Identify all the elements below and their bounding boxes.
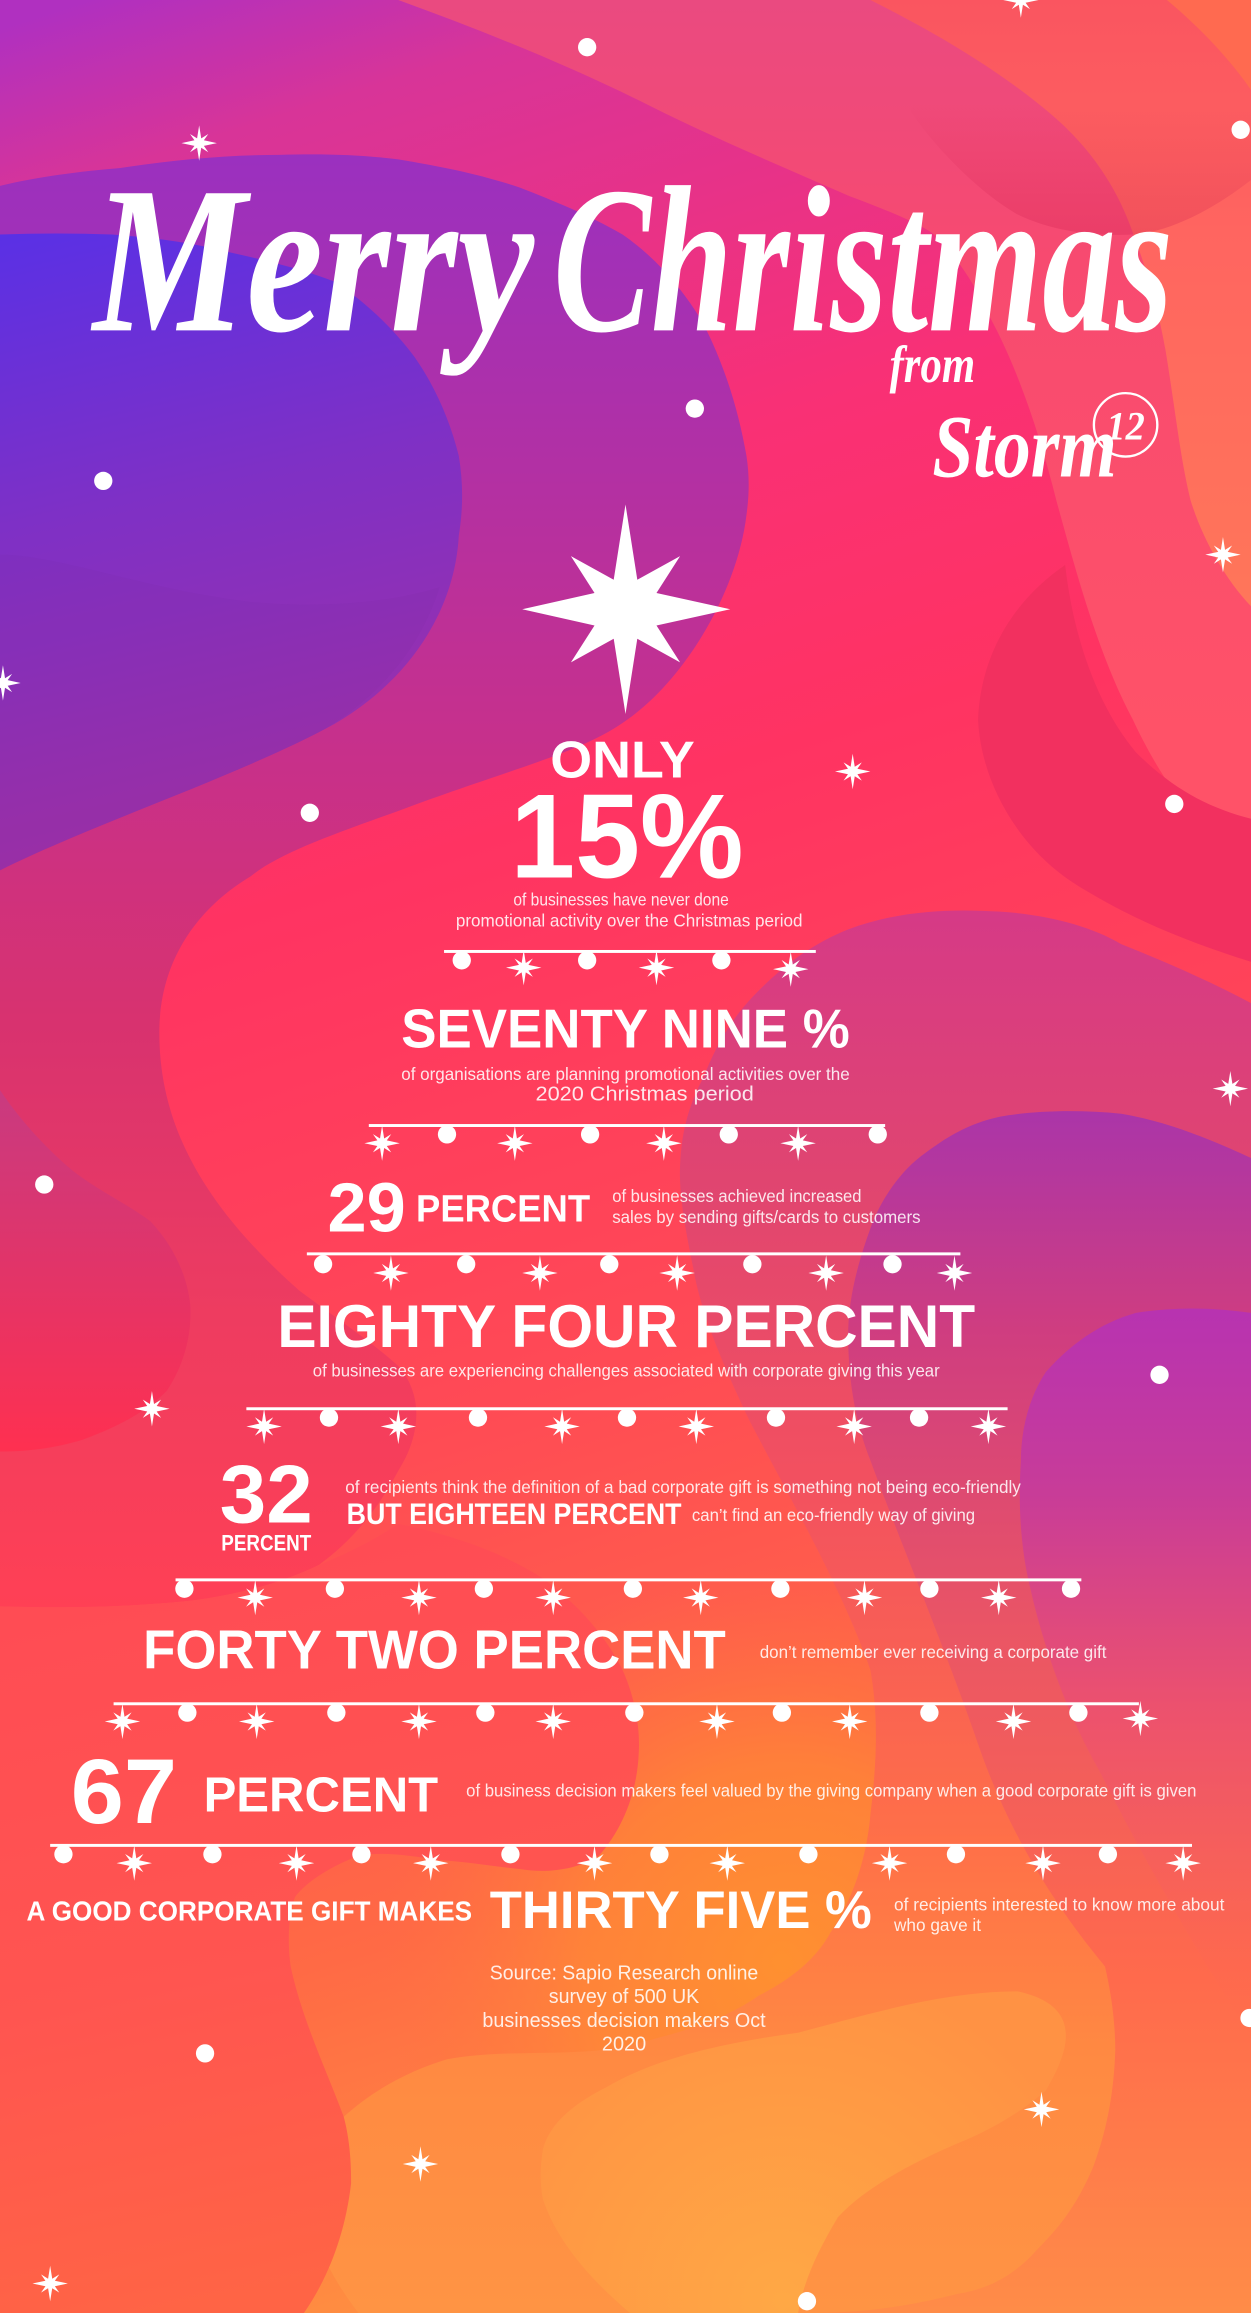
source note	[482, 1962, 766, 2055]
heading: FORTY TWO PERCENT	[143, 1619, 726, 1680]
logo ring	[1094, 393, 1157, 457]
description line two: promotional activity over the Christmas period	[456, 910, 803, 930]
label PERCENT: PERCENT	[221, 1530, 312, 1555]
background blob inner shade	[0, 555, 440, 870]
heading: EIGHTY FOUR PERCENT	[277, 1292, 975, 1360]
logo number 12: 12	[1106, 405, 1145, 449]
background right purple blob	[805, 1111, 1251, 2313]
heading: SEVENTY NINE %	[401, 998, 850, 1059]
label PERCENT: PERCENT	[416, 1187, 591, 1230]
lead-in label: A GOOD CORPORATE GIFT MAKES	[27, 1896, 472, 1927]
stat: forty two percent	[143, 1619, 1106, 1680]
figure 29: 29	[328, 1169, 406, 1247]
stat: 32 percent and eighteen percent	[220, 1447, 1021, 1555]
background lower-left red blob	[0, 1090, 190, 1452]
stat: seventy nine percent	[401, 998, 850, 1105]
background central orange glow	[369, 1549, 1195, 2313]
stat: eighty four percent	[277, 1292, 975, 1380]
label ONLY: ONLY	[550, 730, 695, 788]
background far-right purple blob	[1020, 1308, 1251, 2036]
description continued: can’t find an eco-friendly way of giving	[692, 1505, 975, 1525]
description: of businesses are experiencing challenges associated with corporate giving this year	[313, 1360, 940, 1380]
figure 32: 32	[220, 1447, 313, 1540]
background lower light orange blob	[541, 1991, 1066, 2313]
description: of business decision makers feel valued by the giving company when a good corporate gift is given	[466, 1781, 1196, 1801]
background top-right corner	[1167, 0, 1251, 90]
title: Merry Christmas	[90, 144, 1173, 376]
background right pink wave flowing to lower orange	[304, 910, 1251, 2313]
background large purple blob	[0, 154, 749, 1607]
description line two: 2020 Christmas period	[536, 1083, 754, 1105]
background top-right soft shadow blob	[910, 44, 1251, 235]
string of lights 6	[105, 1701, 1158, 1739]
background lower-left red-orange blob	[0, 1524, 639, 2313]
background blue-violet blob	[0, 233, 462, 870]
description line two: sales by sending gifts/cards to customers	[612, 1207, 921, 1227]
string of lights 2	[364, 1124, 887, 1161]
heading: THIRTY FIVE %	[490, 1881, 872, 1940]
figure 15%: 15%	[510, 771, 744, 904]
description: of recipients interested to know more about	[894, 1894, 1225, 1914]
description: of recipients think the definition of a bad corporate gift is something not being eco-friendly	[345, 1477, 1021, 1497]
stat: thirty five percent	[27, 1881, 1225, 1940]
background right red blob	[978, 565, 1251, 962]
description line two: who gave it	[893, 1915, 981, 1935]
source line 2: survey of 500 UK	[549, 1985, 699, 2008]
stat: only 15 percent	[456, 730, 803, 930]
logo wordmark Storm: Storm	[932, 398, 1117, 496]
description: of organisations are planning promotional activities over the	[401, 1064, 850, 1084]
string of lights 7	[50, 1844, 1201, 1881]
source line 1: Source: Sapio Research online	[490, 1962, 758, 1985]
description: of businesses have never done	[513, 890, 729, 910]
background pink band	[0, 0, 1251, 944]
description: don’t remember ever receiving a corporate gift	[760, 1642, 1106, 1662]
label BUT EIGHTEEN PERCENT: BUT EIGHTEEN PERCENT	[347, 1498, 682, 1531]
description: of businesses achieved increased	[612, 1186, 862, 1206]
subtitle: from: from	[890, 336, 975, 394]
string of lights 4	[246, 1407, 1008, 1444]
source line 3: businesses decision makers Oct	[482, 2009, 766, 2032]
source line 4: 2020	[602, 2032, 646, 2055]
stat: 67 percent	[71, 1741, 1196, 1843]
string of lights 3	[307, 1252, 972, 1291]
label PERCENT: PERCENT	[204, 1768, 438, 1822]
stat: 29 percent	[328, 1169, 921, 1247]
logo: Storm 12	[932, 393, 1157, 496]
icon: large star	[522, 504, 730, 714]
figure 67: 67	[71, 1741, 177, 1843]
string of lights 5	[175, 1578, 1081, 1615]
title word Merry: Merry	[90, 144, 535, 376]
string of lights 1	[444, 950, 816, 987]
